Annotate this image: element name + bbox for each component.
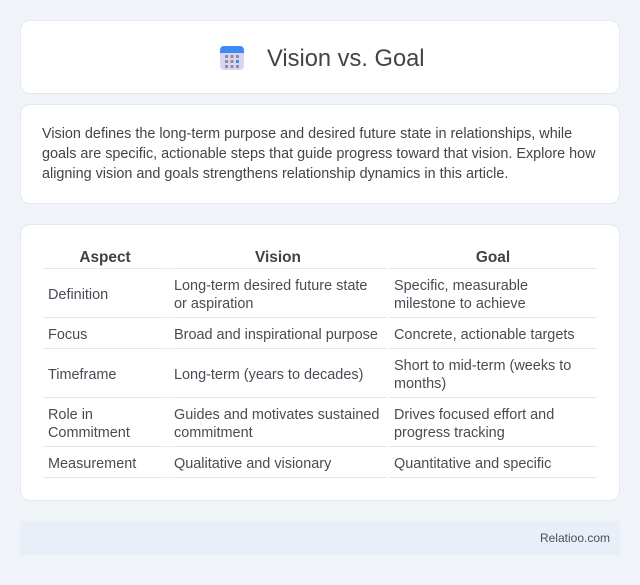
intro text: goals are specific, actionable steps that guide progress toward that vision. Explore how [42, 146, 596, 162]
panel: introduction [20, 104, 620, 204]
Role vision [174, 407, 379, 441]
Role goal [394, 407, 554, 441]
Definition vision: Long-term desired future state [174, 278, 367, 294]
row: Timeframe: Timeframe [48, 367, 116, 383]
Measurement vision: Qualitative and visionary [174, 456, 331, 472]
Definition goal: Specific, measurable [394, 278, 528, 294]
row: Role in Commitment: Role in [48, 407, 93, 423]
Definition vision [174, 278, 367, 312]
title: Vision vs. Goal [267, 46, 425, 72]
header: Goal: Goal [476, 249, 510, 266]
intro text: aligning vision and goals strengthens relationship dynamics in this article. [42, 166, 508, 182]
row: Focus: Focus [48, 327, 87, 343]
intro text: Vision defines the long-term purpose and desired future state in relationships, while [42, 126, 572, 142]
row: Measurement: Measurement [48, 456, 136, 472]
header: Vision: Vision [255, 249, 301, 266]
row: Role in Commitment: Commitment [48, 425, 130, 441]
icon: calendar [220, 46, 244, 70]
Measurement goal: Quantitative and specific [394, 456, 551, 472]
Timeframe goal: months) [394, 376, 446, 392]
footer text: Relatioo.com [540, 531, 610, 545]
panel: title card [20, 20, 620, 94]
header: Aspect: Aspect [79, 249, 131, 266]
Timeframe goal: Short to mid-term (weeks to [394, 358, 571, 374]
intro text [42, 126, 596, 182]
Role goal: Drives focused effort and [394, 407, 554, 423]
row: Role in Commitment [48, 407, 130, 441]
panel: comparison table [20, 224, 620, 501]
Role vision: commitment [174, 425, 253, 441]
Focus goal: Concrete, actionable targets [394, 327, 575, 343]
Definition vision: or aspiration [174, 296, 253, 312]
Definition goal [394, 278, 528, 312]
Timeframe vision: Long-term (years to decades) [174, 367, 363, 383]
Role goal: progress tracking [394, 425, 505, 441]
footer bar [20, 521, 620, 555]
Timeframe goal [394, 358, 571, 392]
Definition goal: milestone to achieve [394, 296, 526, 312]
Role vision: Guides and motivates sustained [174, 407, 379, 423]
row: Definition: Definition [48, 287, 108, 303]
Focus vision: Broad and inspirational purpose [174, 327, 378, 343]
